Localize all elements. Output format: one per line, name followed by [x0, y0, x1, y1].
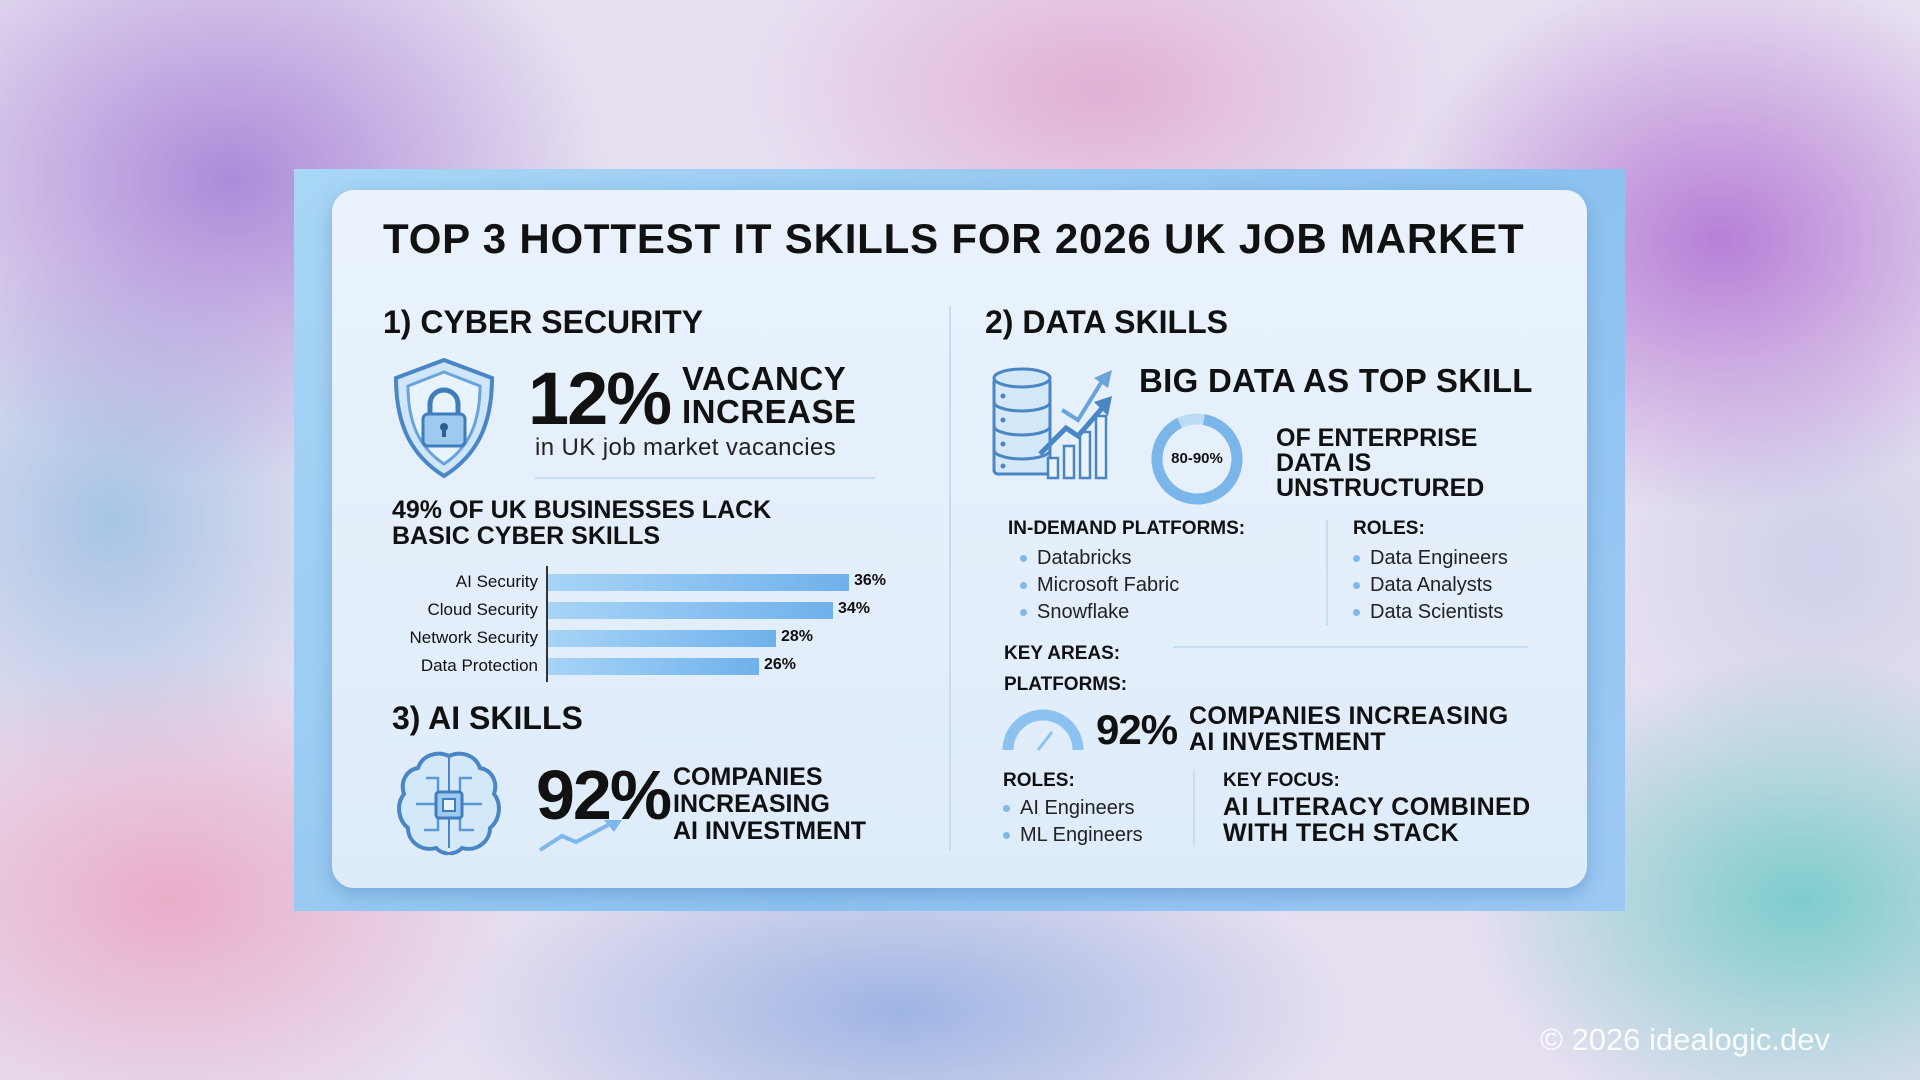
bar: AI Security — [456, 572, 886, 591]
in-demand platforms list — [1008, 518, 1245, 623]
49% statement: 49% OF UK BUSINESSES LACK — [392, 496, 771, 524]
icon: trend arrow — [539, 820, 622, 852]
data roles list: Data Analysts — [1370, 574, 1492, 596]
AI roles list: ROLES: — [1003, 770, 1075, 791]
companies increasing text: AI INVESTMENT — [1189, 728, 1386, 756]
bar: Data Protection — [421, 656, 796, 675]
heading: data skills: 2) DATA SKILLS — [985, 304, 1228, 340]
stat: 92% AI: 92% — [536, 756, 670, 834]
bar: Cloud Security: Cloud Security — [427, 600, 538, 619]
main card — [332, 190, 1587, 888]
donut 80-90% — [1152, 414, 1242, 504]
copyright: © 2026 idealogic.dev — [1540, 1022, 1830, 1057]
key areas / platforms labels — [1004, 643, 1127, 695]
stat: 12%: 12% — [528, 357, 670, 440]
data roles list: Data Engineers — [1370, 547, 1508, 569]
in-demand platforms list: Snowflake — [1037, 601, 1129, 623]
data roles list — [1353, 518, 1508, 623]
vacancy increase — [682, 360, 857, 430]
bar: Network Security — [410, 628, 813, 647]
enterprise data text: UNSTRUCTURED — [1276, 474, 1484, 502]
title: TOP 3 HOTTEST IT SKILLS FOR 2026 UK JOB MARKET — [383, 215, 1524, 262]
icon: shield — [394, 358, 494, 478]
bar: AI Security: 36% — [854, 572, 886, 589]
outer frame — [294, 169, 1625, 911]
stat: 92% data: 92% — [1096, 706, 1177, 753]
bar: Cloud Security: 34% — [838, 600, 870, 617]
companies increasing AI investment — [673, 763, 866, 845]
icon: brain — [397, 752, 501, 856]
AI roles list: ML Engineers — [1020, 824, 1143, 846]
heading: cyber security: 1) CYBER SECURITY — [383, 304, 703, 340]
bar: Network Security: Network Security — [410, 628, 538, 647]
icon: gauge — [1002, 710, 1084, 751]
subtitle: in UK job market vacancies — [535, 434, 836, 461]
vacancy increase: VACANCY — [682, 360, 846, 397]
AI roles list: AI Engineers — [1020, 797, 1135, 819]
data roles list: Data Scientists — [1370, 601, 1503, 623]
companies increasing AI investment: COMPANIES — [673, 763, 823, 791]
49% statement — [392, 496, 771, 550]
key areas / platforms labels: PLATFORMS: — [1004, 674, 1127, 695]
key focus: AI LITERACY COMBINED — [1223, 793, 1531, 821]
enterprise data text: DATA IS — [1276, 449, 1371, 477]
bar: Data Protection: 26% — [764, 656, 796, 673]
bar: AI Security: AI Security — [456, 572, 538, 591]
in-demand platforms list: Databricks — [1037, 547, 1131, 569]
enterprise data text — [1276, 424, 1484, 502]
big data heading: BIG DATA AS TOP SKILL — [1139, 362, 1533, 399]
key areas / platforms labels: KEY AREAS: — [1004, 643, 1120, 664]
AI roles list — [1003, 770, 1143, 846]
bar: Data Protection: Data Protection — [421, 656, 538, 675]
vacancy increase: INCREASE — [682, 393, 857, 430]
donut 80-90%: 80-90% — [1171, 450, 1223, 467]
enterprise data text: OF ENTERPRISE — [1276, 424, 1477, 452]
data roles list: ROLES: — [1353, 518, 1425, 539]
heading: AI skills: 3) AI SKILLS — [392, 700, 583, 736]
companies increasing AI investment: INCREASING — [673, 790, 830, 818]
bar: Network Security: 28% — [781, 628, 813, 645]
in-demand platforms list: IN-DEMAND PLATFORMS: — [1008, 518, 1245, 539]
in-demand platforms list: Microsoft Fabric — [1037, 574, 1179, 596]
key focus: WITH TECH STACK — [1223, 819, 1459, 847]
companies increasing AI investment: AI INVESTMENT — [673, 817, 866, 845]
bar chart — [410, 566, 886, 682]
companies increasing text — [1189, 702, 1508, 756]
key focus — [1223, 770, 1531, 847]
key focus: KEY FOCUS: — [1223, 770, 1340, 791]
49% statement: BASIC CYBER SKILLS — [392, 522, 660, 550]
bar: Cloud Security — [427, 600, 870, 619]
icon: database with chart — [992, 368, 1112, 480]
companies increasing text: COMPANIES INCREASING — [1189, 702, 1508, 730]
